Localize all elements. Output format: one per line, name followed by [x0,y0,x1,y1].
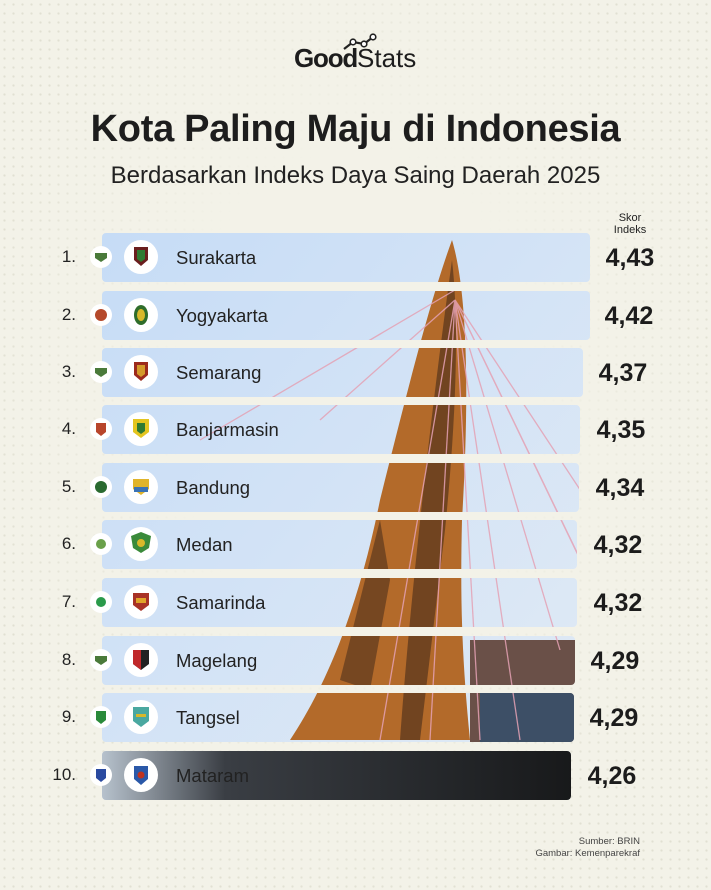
row 3: Semarang [176,362,261,383]
row 4: Banjarmasin [176,419,279,440]
row 7: 7. [62,592,76,611]
row 2: Yogyakarta [176,305,268,326]
row 6 [62,531,642,559]
row 2: 4,42 [605,302,653,330]
row 1: Surakarta [176,247,256,268]
logo: Good [294,43,357,73]
row 6: 6. [62,534,76,553]
row 10: 4,26 [588,762,636,790]
building [470,640,575,742]
row 8: 4,29 [591,647,639,675]
row 9: 4,29 [590,704,638,732]
subtitle: Berdasarkan Indeks Daya Saing Daerah 2025 [111,162,600,189]
row 8: 8. [62,650,76,669]
row 3 [62,359,647,387]
row 1: 4,43 [606,244,654,272]
row 4 [62,416,645,444]
emblems [90,240,158,274]
row 8 [62,647,639,675]
tower [290,240,470,740]
row 6: Medan [176,534,233,555]
logo [294,33,416,73]
title: Kota Paling Maju di Indonesia [91,108,620,150]
row 7 [62,589,642,617]
row 3: 3. [62,362,76,381]
row 10: 10. [52,765,76,784]
row 5: 5. [62,477,76,496]
row 7: 4,32 [594,589,642,617]
logo: Stats [357,43,416,73]
column header: Indeks [614,224,646,236]
row 7: Samarinda [176,592,265,613]
row 10 [52,762,636,790]
row 1: 1. [62,247,76,266]
row 9: Tangsel [176,707,240,728]
column header [614,212,646,236]
row 10: Mataram [176,765,249,786]
source: Sumber: BRIN [579,836,640,847]
row 9 [62,704,638,732]
row 4: 4. [62,419,76,438]
source: Gambar: Kemenparekraf [535,848,640,859]
column header: Skor [619,212,641,224]
row 9: 9. [62,707,76,726]
row 3: 4,37 [599,359,647,387]
row 2: 2. [62,305,76,324]
row 1 [62,244,654,272]
row 2 [62,302,653,330]
source [535,836,640,859]
row 5: Bandung [176,477,250,498]
row 6: 4,32 [594,531,642,559]
row 5: 4,34 [596,474,644,502]
row 8: Magelang [176,650,257,671]
bars with background photo [102,233,590,800]
row 5 [62,474,644,502]
row 4: 4,35 [597,416,645,444]
